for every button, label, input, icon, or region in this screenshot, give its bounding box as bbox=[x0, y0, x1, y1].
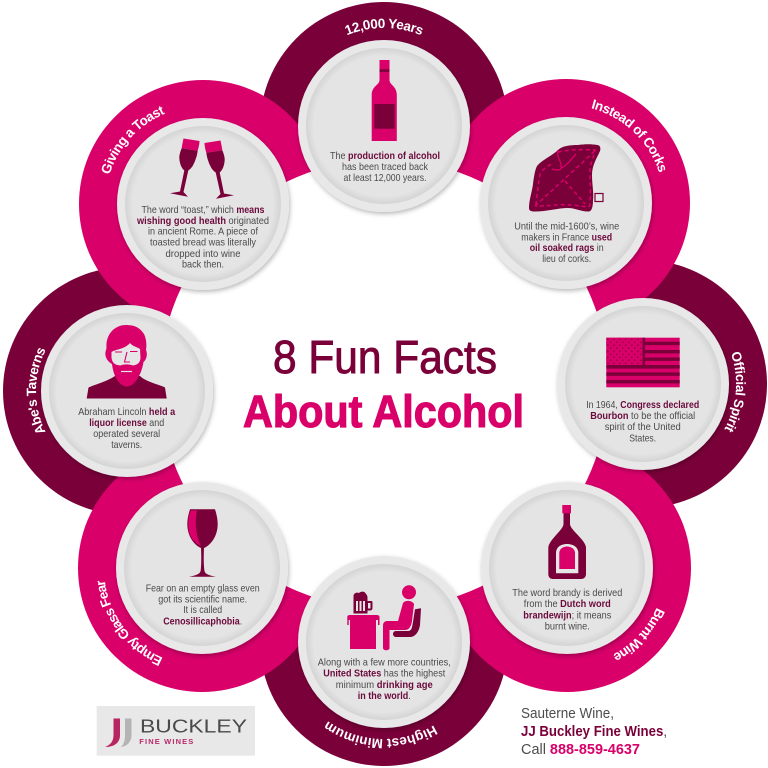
text: Dutch word brandewijn: from the Dutch word bbox=[524, 599, 611, 610]
text: liquor license bbox=[78, 407, 175, 451]
panel: Highest Minimum bbox=[296, 556, 474, 748]
text: drinking age: Along with a few more countries, bbox=[318, 658, 451, 668]
text: oil soaked rags: oil soaked rags in bbox=[530, 243, 604, 254]
label: Burnt Wine: Burnt Wine bbox=[614, 608, 665, 660]
icon: Abraham Lincoln bbox=[87, 325, 167, 398]
text: meaning of toast: wishing good health originated bbox=[136, 216, 269, 227]
label: Instead of Corks: Instead of Corks bbox=[592, 99, 666, 172]
icon: toasting glasses bbox=[170, 138, 234, 199]
text: Congress declared Bourbon: States. bbox=[629, 434, 656, 444]
panel: Empty Glass Fear bbox=[98, 482, 292, 666]
icon: American flag bbox=[606, 338, 680, 387]
text: Cenosillicaphobia: got its scientific name. bbox=[158, 594, 247, 606]
text: meaning of toast: back then. bbox=[182, 260, 224, 270]
logo: JJ Buckley Fine Wines: FINE WINES bbox=[139, 737, 193, 746]
icon: person at a bar with beer bbox=[347, 585, 421, 650]
label: Giving a Toast: Giving a Toast bbox=[102, 106, 165, 174]
label: 12,000 Years: 12,000 Years bbox=[345, 18, 423, 35]
panel: Giving a Toast bbox=[102, 106, 292, 294]
contact text bbox=[521, 706, 667, 758]
text: Dutch word brandewijn: burnt wine. bbox=[545, 622, 590, 632]
icon: oil soaked rag bbox=[529, 144, 603, 212]
text: oil soaked rags: makers in France used bbox=[521, 232, 612, 244]
text: Dutch word brandewijn bbox=[512, 588, 622, 632]
text: meaning of toast: in ancient Rome. A piece of bbox=[148, 226, 258, 238]
icon: brandy bottle bbox=[548, 505, 586, 579]
text: liquor license: liquor license and bbox=[89, 418, 164, 429]
text: oil soaked rags bbox=[514, 222, 619, 265]
logo: JJ Buckley Fine Wines: BUCKLEY bbox=[140, 716, 247, 736]
text: meaning of toast bbox=[136, 205, 269, 270]
text: Cenosillicaphobia: Fear on an empty glass even bbox=[146, 584, 260, 594]
icon: wine glass bbox=[187, 509, 218, 577]
contact text: Sauterne Wine, bbox=[521, 706, 614, 722]
panel: Abe's Taverns bbox=[26, 304, 216, 482]
label: Highest Minimum: Highest Minimum bbox=[325, 722, 438, 748]
panel: Burnt Wine bbox=[480, 482, 665, 660]
title: About Alcohol bbox=[243, 386, 524, 437]
text: production of alcohol: at least 12,000 years. bbox=[344, 173, 426, 184]
text: meaning of toast: The word “toast,” which means bbox=[142, 205, 265, 216]
text: production of alcohol: has been traced back bbox=[342, 162, 429, 173]
text: production of alcohol: The production of alcohol bbox=[330, 151, 440, 162]
text: Congress declared Bourbon: spirit of the United bbox=[605, 422, 681, 433]
label: Abe's Taverns: Abe's Taverns bbox=[26, 348, 46, 432]
text: meaning of toast: toasted bread was literally bbox=[150, 238, 257, 248]
panel: Official Spirit bbox=[556, 298, 746, 474]
text: drinking age: United States has the highest bbox=[323, 668, 445, 680]
text: production of alcohol bbox=[330, 151, 440, 184]
text: Dutch word brandewijn: brandewijn; it means bbox=[523, 610, 611, 622]
text: oil soaked rags: Until the mid-1600’s, wine bbox=[514, 222, 619, 232]
text: drinking age bbox=[318, 658, 451, 702]
label: Empty Glass Fear: Empty Glass Fear bbox=[98, 580, 162, 666]
text: Dutch word brandewijn: The word brandy is derived bbox=[512, 588, 622, 599]
text: drinking age: minimum drinking age bbox=[336, 680, 433, 691]
label: Official Spirit: Official Spirit bbox=[724, 352, 746, 432]
text: Congress declared Bourbon: Bourbon to be the official bbox=[590, 411, 695, 422]
text: Congress declared Bourbon: In 1964, Congress declared bbox=[586, 400, 699, 411]
panel: Instead of Corks bbox=[478, 99, 666, 294]
text: Cenosillicaphobia: It is called bbox=[183, 605, 222, 616]
text: Cenosillicaphobia bbox=[146, 584, 260, 628]
text: Congress declared Bourbon bbox=[586, 400, 699, 444]
contact text: JJ Buckley Fine Wines, bbox=[521, 724, 667, 740]
text: Cenosillicaphobia: Cenosillicaphobia. bbox=[163, 616, 242, 628]
text: drinking age: in the world. bbox=[358, 691, 411, 702]
text: meaning of toast: dropped into wine bbox=[166, 249, 241, 260]
panel: 12,000 Years bbox=[296, 18, 474, 216]
contact text: Call 888-859-4637 bbox=[521, 742, 640, 758]
logo: JJ Buckley Fine Wines bbox=[97, 706, 255, 756]
icon: wine bottle bbox=[372, 60, 397, 141]
text: liquor license: Abraham Lincoln held a bbox=[78, 407, 175, 418]
text: liquor license: operated several bbox=[93, 429, 160, 440]
title bbox=[243, 331, 524, 437]
text: liquor license: taverns. bbox=[111, 440, 142, 451]
text: oil soaked rags: lieu of corks. bbox=[542, 254, 591, 265]
title: 8 Fun Facts bbox=[273, 331, 497, 383]
